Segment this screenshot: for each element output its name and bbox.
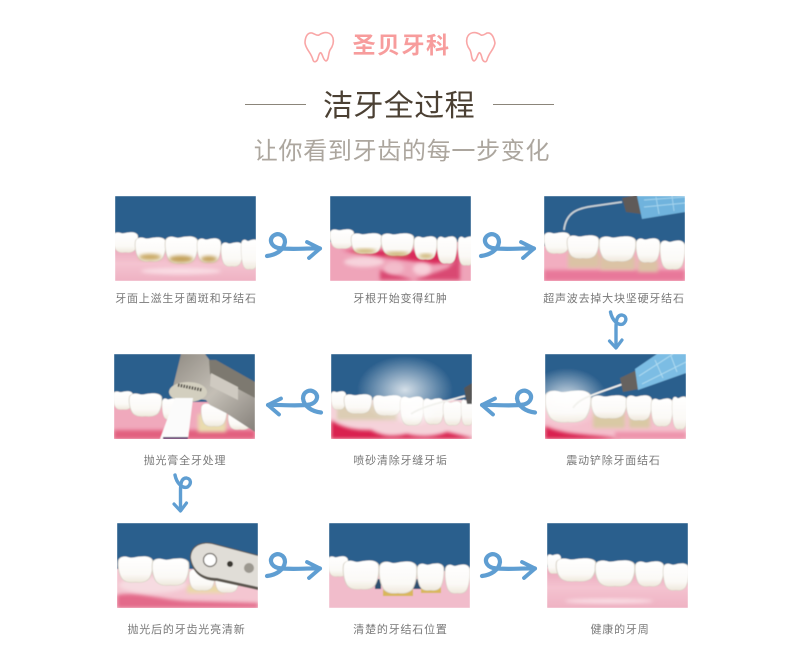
panel: step 7 after polishing <box>117 523 258 608</box>
panel: step 5 sandblasting <box>331 354 474 439</box>
logo: 圣贝牙科 <box>305 32 495 62</box>
label: step 1: 牙面上滋生牙菌斑和牙结石 <box>115 291 257 305</box>
arrow: step 7 to 8 <box>267 554 320 578</box>
arrow: step 8 to 9 <box>482 554 535 578</box>
spray cloud <box>545 370 605 419</box>
panel: step 2 swollen gums <box>330 196 475 281</box>
spray cloud <box>360 358 450 418</box>
instrument: nozzle <box>411 396 465 414</box>
panel: step 9 healthy teeth <box>547 523 689 608</box>
instrument: handpiece <box>160 354 255 439</box>
instrument: scaler <box>573 354 686 408</box>
arrow: step 6 to 7 <box>174 475 190 511</box>
icon: right tooth outline <box>467 33 495 62</box>
label: step 2: 牙根开始变得红肿 <box>353 291 448 305</box>
arrow: step 1 to 2 <box>267 234 320 258</box>
panel: step 3 ultrasonic scaler <box>544 195 685 281</box>
label: step 6: 抛光膏全牙处理 <box>144 453 226 467</box>
label: step 7: 抛光后的牙齿光亮清新 <box>128 622 246 636</box>
label: step 9: 健康的牙周 <box>590 622 650 636</box>
arrow: step 3 to 4 <box>610 312 626 348</box>
instrument: polisher head <box>190 543 258 590</box>
label: step 5: 喷砂清除牙缝牙垢 <box>353 453 448 467</box>
icon: left tooth outline <box>305 33 333 62</box>
label: step 4: 震动铲除牙面结石 <box>566 453 661 467</box>
instrument: scaler <box>564 195 685 230</box>
subtitle: 让你看到牙齿的每一步变化 <box>254 138 550 165</box>
arrow: step 5 to 6 <box>268 391 321 414</box>
logo text: 圣贝牙科 <box>352 32 450 58</box>
panel: step 6 polishing <box>113 354 255 439</box>
arrow: step 4 to 5 <box>482 391 535 414</box>
panel: step 4 vibration scaling <box>545 354 686 439</box>
panel: step 8 tartar position <box>328 523 470 608</box>
panel: step 1 plaque and tartar <box>113 196 259 281</box>
title: 洁牙全过程 <box>323 90 475 123</box>
label: step 8: 清楚的牙结石位置 <box>353 622 448 636</box>
arrow: step 2 to 3 <box>481 234 534 258</box>
label: step 3: 超声波去掉大块坚硬牙结石 <box>543 291 685 305</box>
